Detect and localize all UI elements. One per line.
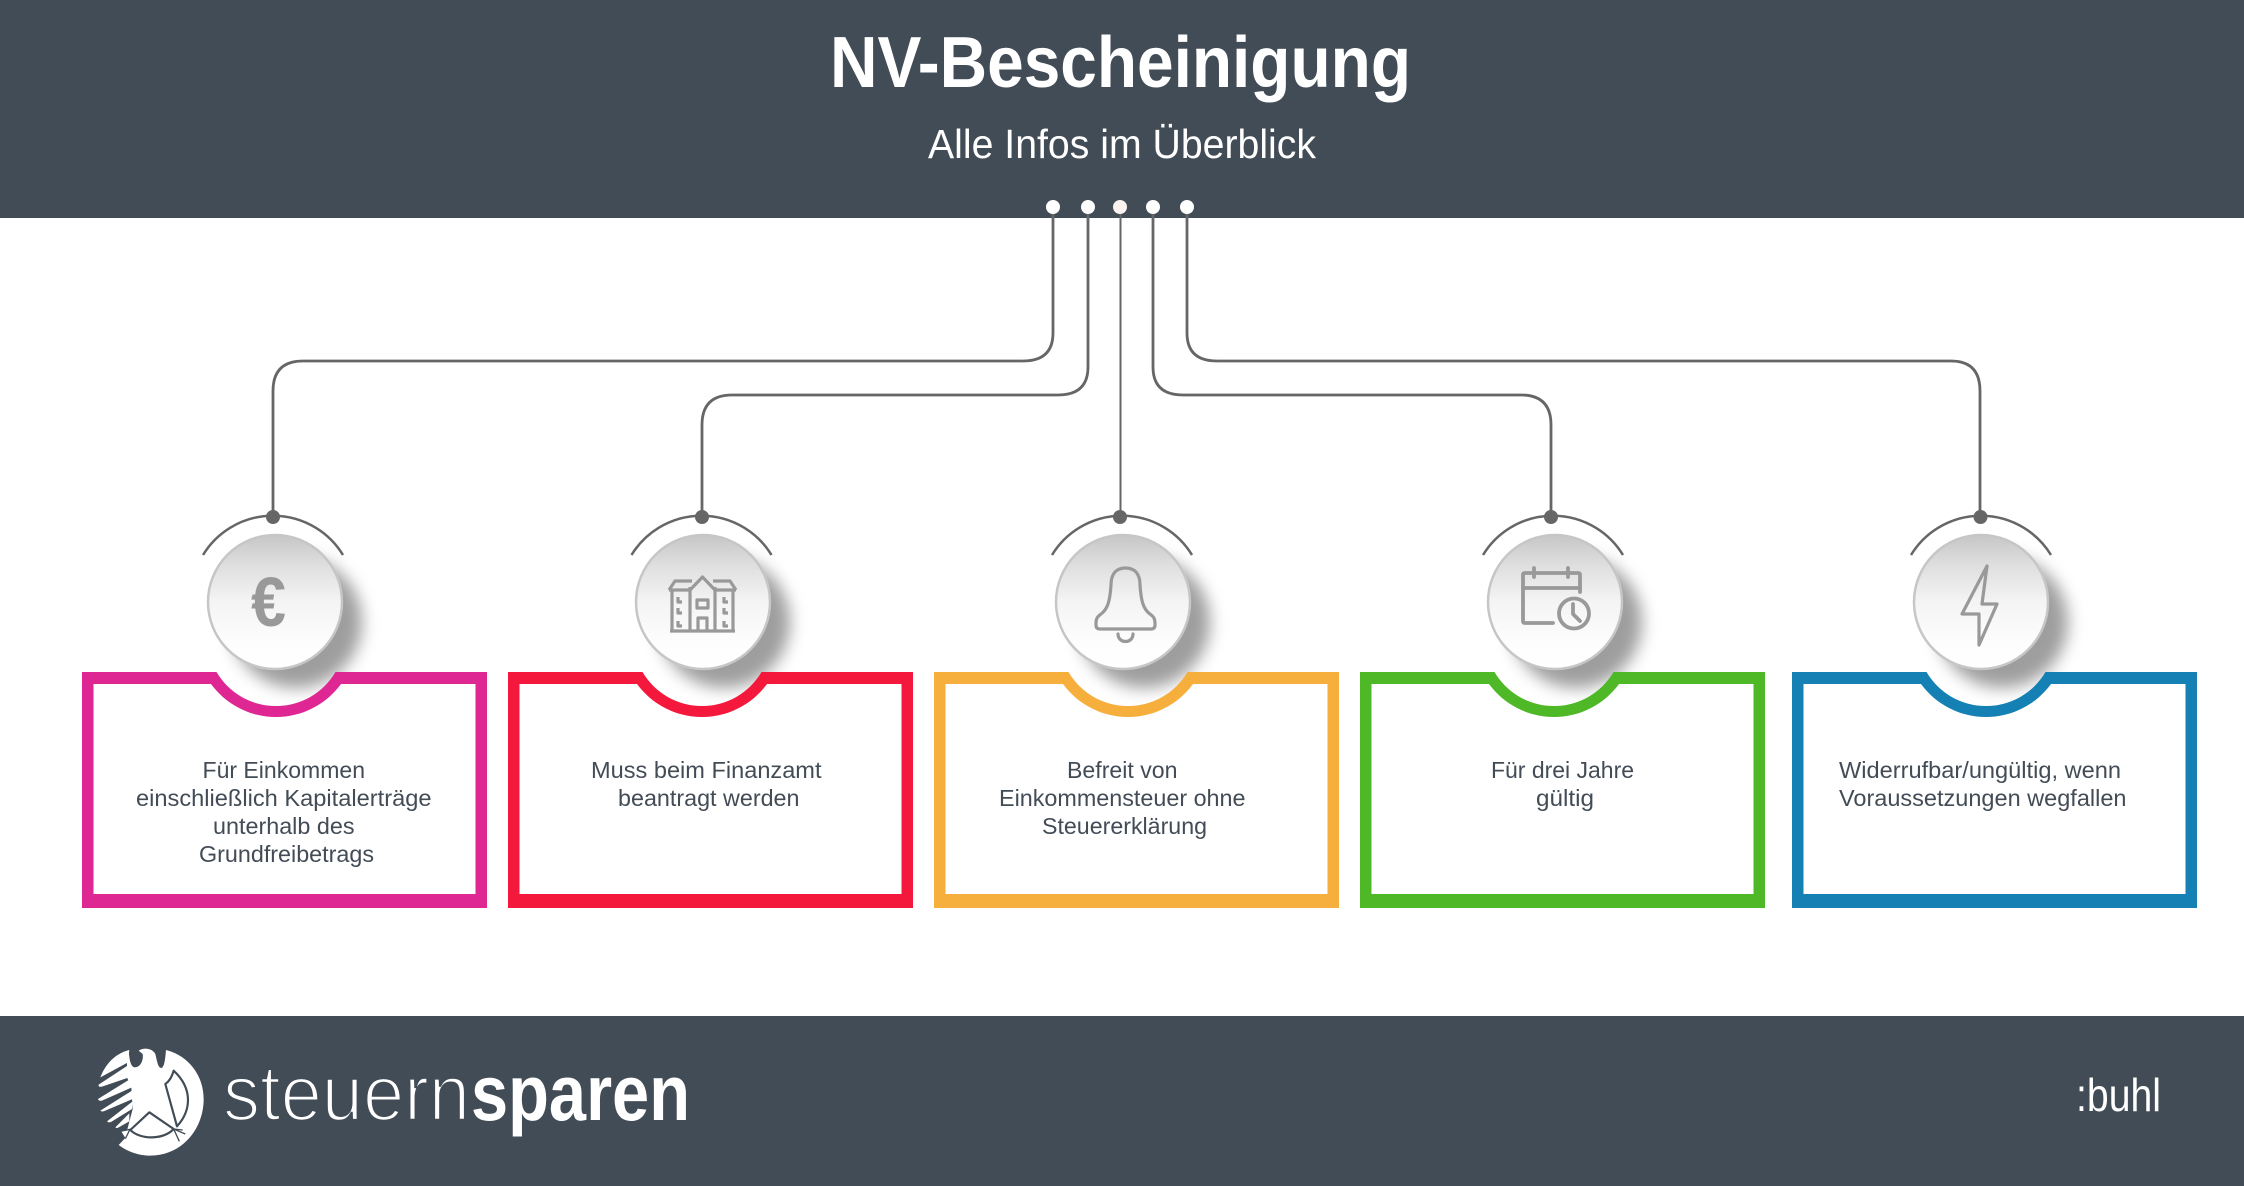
box frame orange [934, 672, 1339, 908]
text block [1491, 757, 1634, 811]
text block [136, 757, 432, 867]
panel: Einkommen [82, 510, 487, 908]
arc above disc [1483, 516, 1623, 555]
icon disc [208, 535, 342, 669]
text block: Für drei Jahre [1491, 757, 1634, 783]
text block: Für Einkommen [202, 757, 365, 783]
connector lines [273, 207, 1980, 517]
panel: Gültigkeit [1360, 510, 1765, 908]
panel: Steuererklärung [934, 510, 1339, 908]
text block: Voraussetzungen wegfallen [1839, 785, 2126, 811]
logo wordmark [223, 1048, 690, 1137]
icon: lightning bolt [1962, 566, 1997, 645]
box frame pink [82, 672, 487, 908]
text block: Einkommensteuer ohne [999, 785, 1246, 811]
box frame red [508, 672, 913, 908]
footer band [0, 1016, 2244, 1186]
icon: eagle logo [98, 1049, 204, 1156]
text block: Steuererklärung [1042, 813, 1207, 839]
icon disc [636, 535, 770, 669]
arc dot [695, 510, 709, 524]
text block [591, 757, 822, 811]
text block: gültig [1536, 785, 1594, 811]
icon disc [1914, 535, 2048, 669]
icon: bell [1096, 568, 1155, 642]
logo wordmark: steuern [223, 1048, 470, 1137]
arc above disc [1052, 516, 1192, 555]
text block: beantragt werden [618, 785, 800, 811]
text block: Widerrufbar/ungültig, wenn [1839, 757, 2121, 783]
arc dot [1544, 510, 1558, 524]
text block: einschließlich Kapitalerträge [136, 785, 432, 811]
icon: euro: € [251, 563, 286, 641]
text block: Grundfreibetrags [199, 841, 374, 867]
icon disc [1488, 535, 1622, 669]
text block: Befreit von [1067, 757, 1178, 783]
drop shadows of icon discs [230, 556, 2068, 688]
panel: Finanzamt [508, 510, 913, 908]
arc above disc [632, 516, 772, 555]
header band [0, 0, 2244, 218]
subtitle: Alle Infos im Überblick [928, 121, 1316, 167]
box frame green [1360, 672, 1765, 908]
icon: house [669, 577, 736, 631]
box frame blue [1792, 672, 2197, 908]
arc dot [1113, 510, 1127, 524]
text block: unterhalb des [213, 813, 354, 839]
logo wordmark: sparen [471, 1048, 690, 1137]
buhl logo: :buhl [2076, 1069, 2161, 1121]
arc dot [266, 510, 280, 524]
title: NV-Bescheinigung [830, 23, 1411, 103]
arc above disc [1911, 516, 2051, 555]
panel: Widerruf [1792, 510, 2197, 908]
connector start dots [1046, 200, 1194, 214]
icon: calendar with clock [1523, 568, 1589, 628]
arc above disc [203, 516, 343, 555]
text block: Muss beim Finanzamt [591, 757, 822, 783]
text block [999, 757, 1246, 839]
icon disc [1056, 535, 1190, 669]
arc dot [1974, 510, 1988, 524]
text block [1839, 757, 2126, 811]
